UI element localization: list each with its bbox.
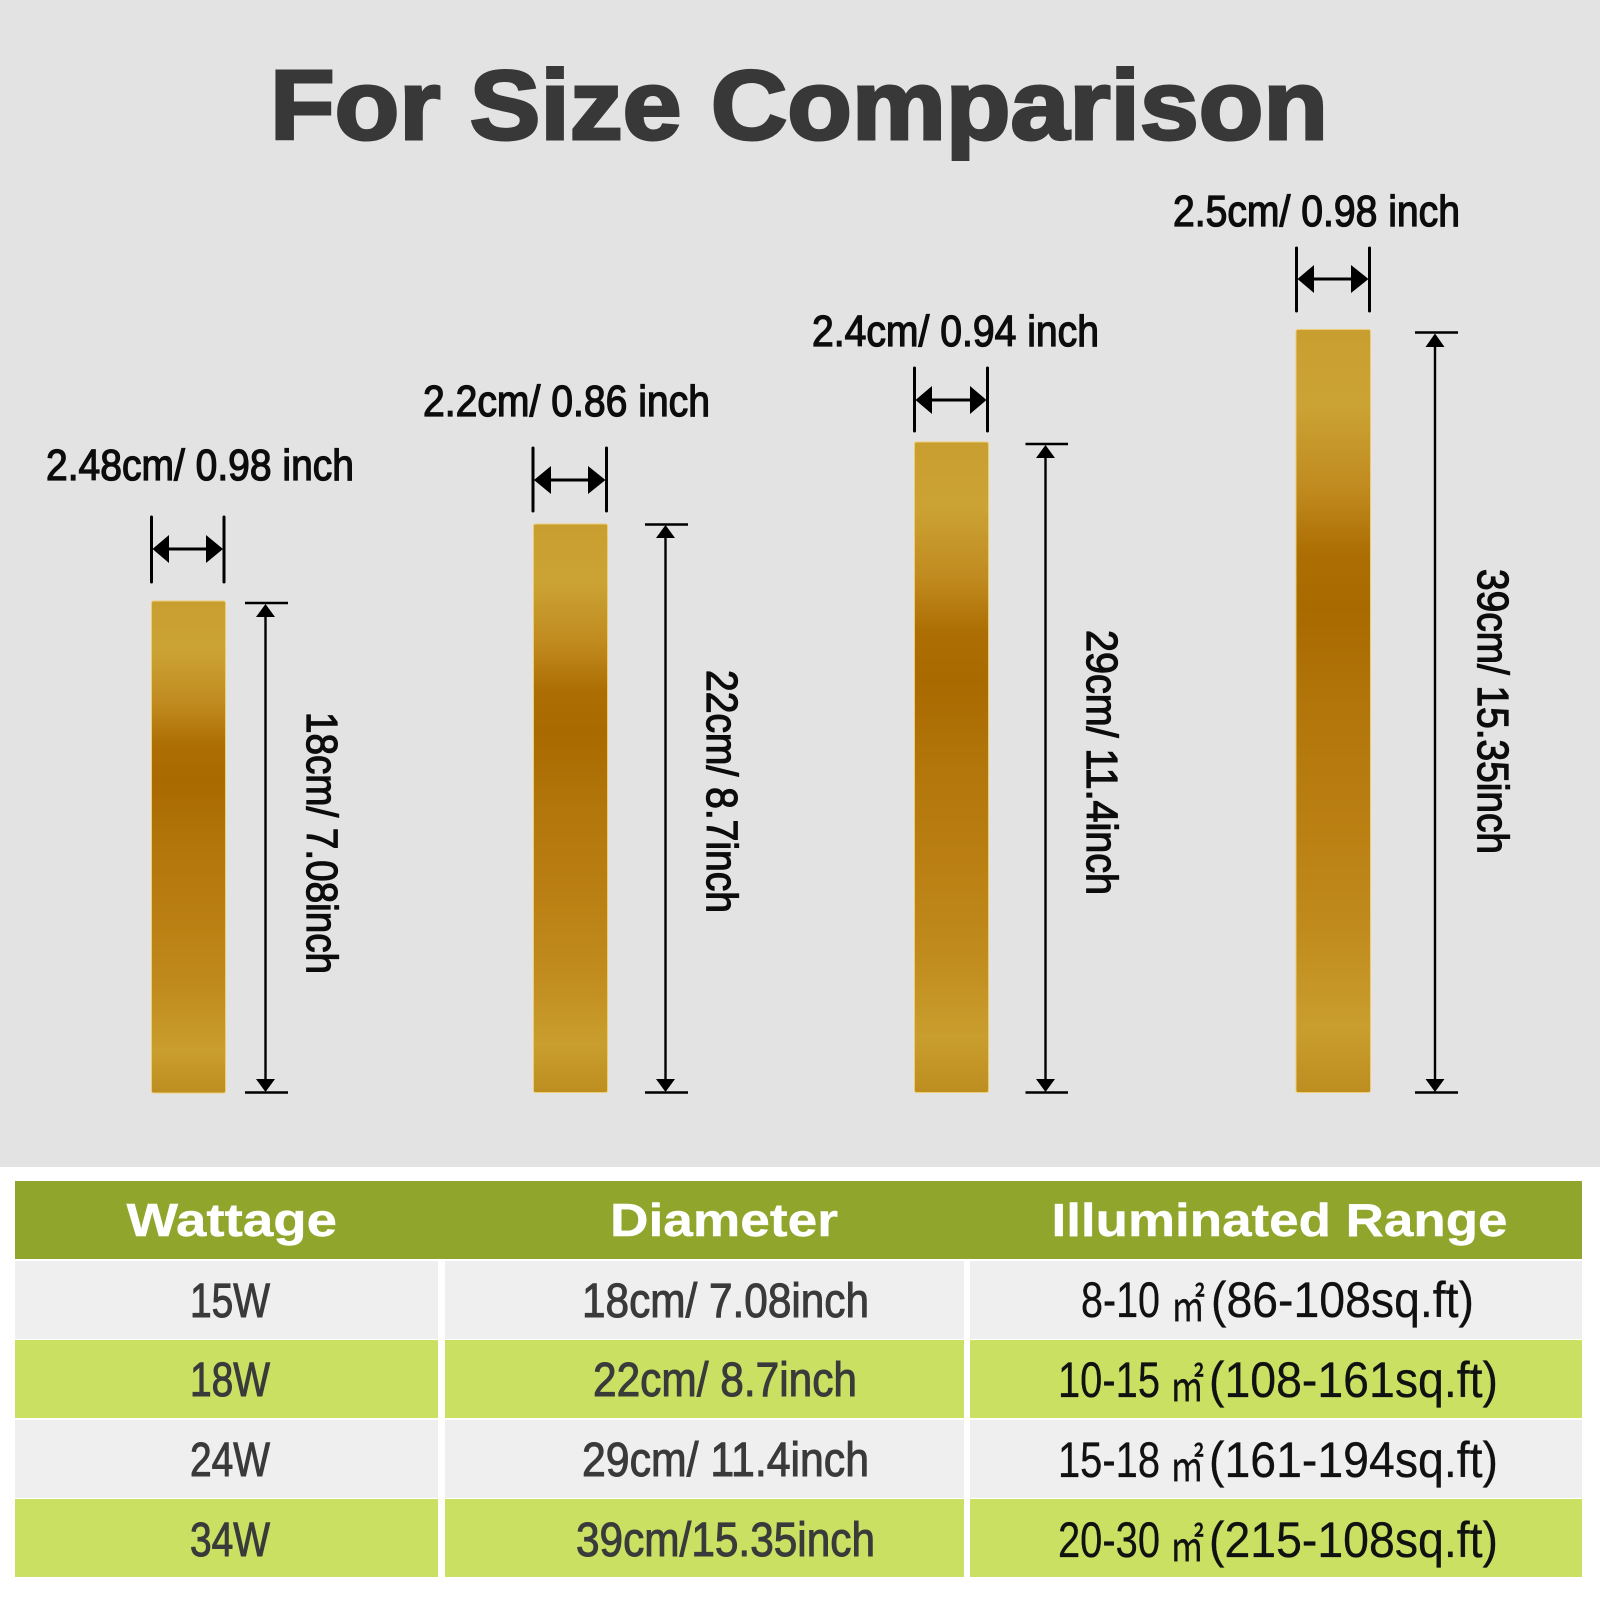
table row: 18W: (108-161sq.ft) bbox=[1209, 1352, 1498, 1408]
table row: 34W: (215-108sq.ft) bbox=[1209, 1512, 1498, 1568]
lamp 2: 18W size diagram bbox=[423, 377, 746, 1092]
width arrow 3 bbox=[914, 368, 988, 431]
height arrow 2 bbox=[645, 524, 688, 1092]
table row: 24W: ㎡ bbox=[1170, 1442, 1204, 1491]
table row: 34W: 20-30 bbox=[1058, 1512, 1160, 1568]
table header row: Wattage bbox=[126, 1194, 337, 1246]
table row: 34W: ㎡ bbox=[1170, 1522, 1204, 1571]
lamp bar 2 bbox=[534, 524, 608, 1092]
background panel bbox=[0, 0, 1600, 1167]
table row: 24W: (161-194sq.ft) bbox=[1209, 1432, 1498, 1488]
table row: 15W bbox=[15, 1261, 1582, 1339]
width label 3: 2.4cm/ 0.94 inch bbox=[812, 307, 1099, 356]
width label 4: 2.5cm/ 0.98 inch bbox=[1173, 187, 1460, 236]
height arrow 1 bbox=[245, 603, 288, 1092]
table row: 24W: 15-18 bbox=[1058, 1432, 1160, 1488]
height label 4: 39cm/ 15.35inch bbox=[1468, 569, 1517, 854]
table row: 18W: 18W bbox=[190, 1354, 271, 1407]
width label 2: 2.2cm/ 0.86 inch bbox=[423, 377, 710, 426]
table row: 18W: 10-15 bbox=[1058, 1352, 1160, 1408]
table row: 15W: 15W bbox=[190, 1275, 271, 1328]
height arrow 3 bbox=[1026, 444, 1068, 1092]
table header row: Illuminated Range bbox=[1052, 1194, 1508, 1246]
table row: 18W: ㎡ bbox=[1170, 1362, 1204, 1411]
table row: 34W: 34W bbox=[190, 1514, 271, 1567]
table row: 18W: 22cm/ 8.7inch bbox=[593, 1354, 857, 1407]
table row: 24W: 29cm/ 11.4inch bbox=[582, 1434, 869, 1487]
height label 1: 18cm/ 7.08inch bbox=[297, 712, 346, 974]
table row: 15W: 18cm/ 7.08inch bbox=[582, 1275, 869, 1328]
lamp 1: 15W size diagram bbox=[46, 441, 354, 1093]
lamp bar 4 bbox=[1296, 330, 1370, 1092]
table header row: Diameter bbox=[610, 1194, 838, 1246]
height label 2: 22cm/ 8.7inch bbox=[697, 670, 746, 913]
table row: 24W bbox=[15, 1420, 1582, 1498]
table row: 15W: ㎡ bbox=[1171, 1282, 1205, 1331]
table row: 15W: 8-10 bbox=[1081, 1272, 1160, 1328]
height label 3: 29cm/ 11.4inch bbox=[1077, 630, 1126, 895]
lamp 3: 24W size diagram bbox=[812, 307, 1126, 1092]
height arrow 4 bbox=[1415, 332, 1458, 1092]
lamp bar 3 bbox=[914, 442, 988, 1092]
table row: 15W: (86-108sq.ft) bbox=[1211, 1272, 1474, 1328]
width arrow 2 bbox=[533, 448, 606, 511]
lamp bar 1 bbox=[152, 601, 226, 1093]
title: For Size Comparison bbox=[270, 50, 1328, 160]
table row: 24W: 24W bbox=[190, 1434, 271, 1487]
specification table bbox=[15, 1181, 1582, 1577]
table row: 18W bbox=[15, 1340, 1582, 1418]
table row: 34W: 39cm/15.35inch bbox=[576, 1514, 875, 1567]
width arrow 4 bbox=[1296, 248, 1370, 311]
table header row bbox=[15, 1181, 1582, 1259]
width arrow 1 bbox=[152, 517, 224, 582]
width label 1: 2.48cm/ 0.98 inch bbox=[46, 441, 354, 490]
lamp 4: 34W size diagram bbox=[1173, 187, 1517, 1092]
table row: 34W bbox=[15, 1499, 1582, 1577]
